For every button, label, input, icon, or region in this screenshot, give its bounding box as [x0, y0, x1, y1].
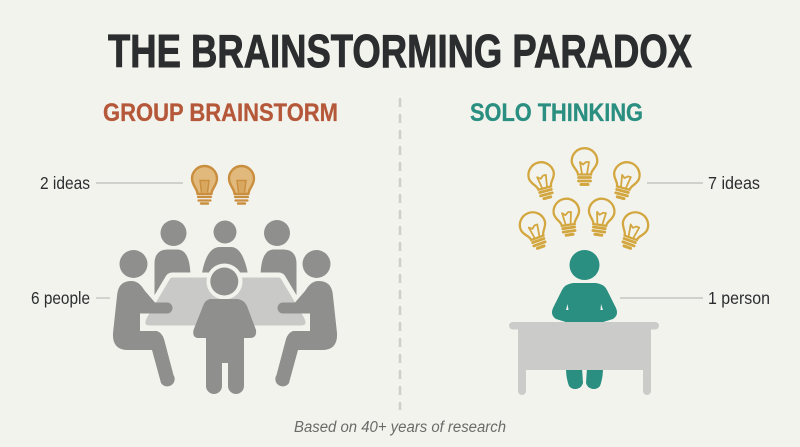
illustration: person at desk — [509, 250, 659, 395]
icon: two group lightbulbs — [192, 166, 254, 204]
heading: group brainstorm: GROUP BRAINSTORM — [103, 99, 338, 127]
heading: solo thinking: SOLO THINKING — [470, 99, 643, 127]
label: 2 ideas: 2 ideas — [40, 173, 90, 193]
illustration: group around table — [113, 220, 337, 394]
center person — [193, 264, 256, 394]
desk — [509, 322, 659, 395]
label: 1 person: 1 person — [708, 288, 770, 308]
footer note: Based on 40+ years of research — [294, 419, 506, 436]
back row people — [154, 220, 296, 295]
table — [143, 275, 308, 328]
person — [552, 250, 617, 389]
icon: seven solo lightbulbs — [516, 148, 652, 252]
label: 7 ideas — [647, 173, 760, 193]
label: 7 ideas: 7 ideas — [708, 173, 760, 193]
label: 6 people: 6 people — [31, 288, 90, 308]
side people — [113, 250, 337, 386]
